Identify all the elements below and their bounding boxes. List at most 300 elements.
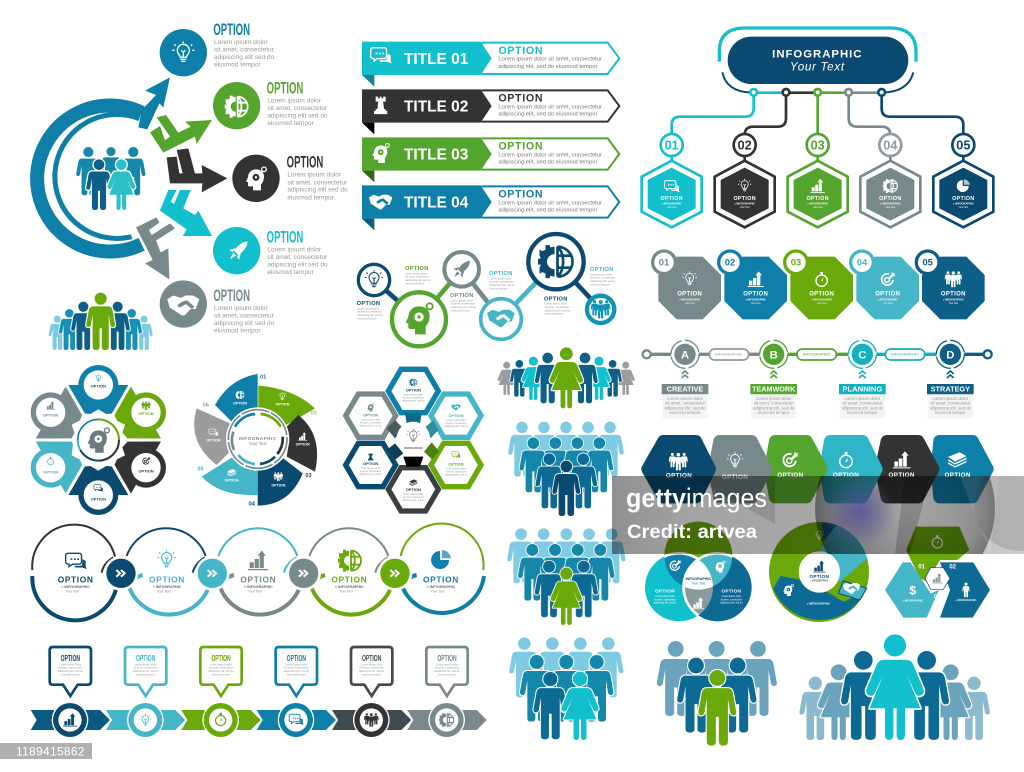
hexagon cycle labels: sit amet, consectetur	[403, 397, 424, 400]
option 3: head: Lorem ipsum dolor	[287, 172, 342, 179]
callout 3: adipiscing elit, sed do	[208, 669, 234, 673]
node B: teamwork: B	[770, 349, 778, 361]
rounded hexagon row	[647, 441, 988, 497]
callout 3	[200, 647, 242, 696]
circular pie diagram	[769, 522, 869, 622]
callout 1	[50, 647, 91, 696]
circle 4: Your Text	[339, 590, 353, 594]
option 5: handshake	[160, 280, 275, 335]
hexagon cycle labels: OPTION	[448, 462, 464, 467]
node A: creative: sit amet, consectetur	[665, 401, 706, 406]
hexagon cycle connectors: INFOGRAPHIC	[404, 446, 423, 450]
circle 1: OPTION	[58, 574, 94, 584]
option 5: handshake: eiusmod tempor	[214, 328, 261, 335]
option 5: handshake: sit amet, consectetur	[214, 313, 275, 320]
hexagon 05: » INFOGRAPHIC	[953, 202, 974, 206]
hexagon 03: » INFOGRAPHIC	[807, 202, 828, 206]
chevron button 1	[104, 556, 138, 591]
octagon 05: OPTION	[941, 291, 966, 297]
circular pie diagram: OPTION	[809, 574, 830, 579]
spiral pie: labels: OPTION	[296, 443, 310, 447]
hexagon 02: Your Text	[740, 206, 750, 209]
option 3: head	[232, 153, 348, 202]
network of connected circles: sit amet, consectetur	[357, 310, 382, 314]
pill: infographic 1	[709, 349, 749, 360]
panel: radial arrows with options	[37, 20, 348, 350]
option 4: rocket: Lorem ipsum dolor	[267, 246, 322, 253]
octagon 05	[916, 251, 985, 319]
hexagon 05	[933, 134, 993, 227]
callout 5: Lorem ipsum dolor	[361, 662, 383, 666]
octagon 05: 05	[922, 258, 933, 268]
hexagon trio	[885, 527, 990, 618]
circle 2: Your Text	[157, 590, 171, 594]
hexagon cycle labels	[360, 379, 468, 502]
option 4: rocket: sit amet, consectetur	[267, 254, 328, 261]
circle 5: OPTION	[423, 574, 459, 584]
hexagon trio: » INFOGRAPHIC	[902, 599, 923, 603]
option 5: handshake: Lorem ipsum dolor	[214, 305, 269, 312]
people in ring	[76, 147, 145, 210]
banner 04: adipiscing elit, sed do eiusmod tempor	[498, 208, 598, 214]
outer ring arc	[37, 105, 142, 251]
hexagon 02: » INFOGRAPHIC	[734, 202, 755, 206]
banner 01: Lorem ipsum dolor sit amet, consectetur	[498, 57, 602, 63]
hexagon 05: 05	[956, 139, 970, 153]
watermark band: Credit: artvea	[627, 522, 757, 543]
hexagon 01: 01	[665, 139, 679, 153]
six-segment wheel: OPTION	[138, 411, 154, 416]
option 2: globe	[213, 78, 328, 129]
hexagon trio: 03	[934, 594, 941, 600]
spiral pie: center: INFOGRAPHIC	[239, 436, 277, 441]
node A: creative	[662, 340, 708, 418]
option 4: rocket	[213, 227, 328, 276]
node B: teamwork: sit amet, consectetur	[754, 401, 794, 406]
pill: infographic 3	[885, 349, 925, 360]
hexagon cycle labels: sit amet, consectetur	[445, 422, 467, 425]
hexagon cycle labels: OPTION	[448, 413, 464, 418]
node C: planning	[839, 340, 886, 418]
octagon 02: Your Text	[751, 302, 761, 305]
network of connected circles: adipiscing elit, sed do	[590, 279, 616, 283]
hexagon row contents: OPTION	[945, 472, 971, 479]
option 1: bulb: OPTION	[213, 20, 250, 39]
spiral pie: labels: 06	[203, 403, 209, 409]
network of connected circles: Lorem ipsum dolor	[451, 298, 473, 302]
hexagon trio: 01	[918, 564, 926, 570]
callout 4: OPTION	[287, 654, 306, 663]
spiral pie: labels: 01	[260, 374, 266, 380]
node D: strategy: eiusmod tempor	[935, 410, 966, 415]
hexagon 04: » INFOGRAPHIC	[880, 202, 901, 206]
network of connected circles: OPTION	[590, 267, 614, 273]
callout 2: adipiscing elit, sed do	[133, 669, 159, 673]
venn diagram: sit amet, consectetur	[721, 598, 742, 601]
hexagon cycle labels: Lorem ipsum dolor	[404, 394, 423, 397]
circle 1	[32, 525, 117, 620]
hexagon cycle	[346, 369, 481, 511]
venn diagram: Lorem ipsum dolor	[722, 595, 741, 598]
callout 5	[351, 647, 392, 696]
hexagon 04: OPTION	[879, 196, 902, 202]
option 3: head: sit amet, consectetur	[287, 179, 348, 186]
hexagon cycle labels: Lorem ipsum dolor	[361, 419, 381, 422]
six-segment wheel: OPTION	[91, 384, 106, 389]
network of connected circles: Lorem ipsum dolor	[590, 272, 612, 276]
network of connected circles: OPTION	[544, 296, 568, 302]
octagon 04: 04	[857, 258, 868, 268]
banner 01	[362, 42, 619, 87]
hexagon cycle labels: adipiscing elit, sed do	[445, 425, 468, 428]
network of connected circles: OPTION	[405, 266, 429, 272]
network of connected circles: adipiscing elit, sed do	[405, 278, 431, 282]
callout 2: Lorem ipsum dolor	[135, 662, 157, 666]
callout 4: Lorem ipsum dolor	[285, 662, 307, 666]
arrow: blue	[138, 77, 170, 129]
hexagon cycle labels: adipiscing elit, sed do	[402, 400, 425, 403]
hexagon cycle labels: Lorem ipsum dolor	[446, 468, 466, 471]
hexagon cycle labels: sit amet, consectetur	[445, 471, 467, 474]
hexagon cycle labels: OPTION	[406, 487, 421, 492]
hexagon 01: » INFOGRAPHIC	[661, 202, 682, 206]
banner 02: adipiscing elit, sed do eiusmod tempor	[498, 112, 598, 118]
people row 4: pair in front	[509, 637, 623, 740]
hexagon 03: OPTION	[806, 196, 829, 202]
banner 03: adipiscing elit, sed do eiusmod tempor	[498, 160, 598, 166]
hexagon 03: 03	[811, 139, 825, 153]
banner 01: adipiscing elit, sed do eiusmod tempor	[498, 64, 598, 70]
hexagon cycle labels: adipiscing elit, sed do	[360, 425, 382, 428]
watermark band	[612, 476, 1024, 554]
node D: strategy: D	[946, 349, 954, 361]
hexagon row contents: OPTION	[666, 473, 692, 480]
node B: teamwork	[750, 340, 797, 418]
venn diagram: adipiscing elit, sed do	[720, 602, 743, 605]
callout 1: sit amet, consectetur	[58, 666, 83, 670]
circle 5	[401, 524, 484, 613]
chevron button 2	[195, 556, 230, 591]
circle 1: Your Text	[65, 590, 79, 594]
option 4: rocket: eiusmod tempor	[267, 269, 315, 276]
callout 1: adipiscing elit, sed do	[58, 669, 84, 673]
pill: infographic 1: INFOGRAPHIC	[715, 352, 743, 357]
connectors	[672, 89, 963, 135]
timeline line	[643, 350, 992, 358]
network of connected circles: Lorem ipsum dolor	[357, 306, 379, 310]
banner 02: TITLE 02	[404, 99, 468, 116]
option 4: rocket: adipiscing elit sed do	[267, 261, 328, 268]
network of connected circles	[357, 234, 616, 346]
image id tag: 1189415862	[16, 744, 85, 758]
circle 4: » INFOGRAPHIC	[335, 585, 364, 589]
panel: wheel, pie and hexagon cycle	[31, 365, 481, 515]
octagon 05: Your Text	[949, 302, 958, 305]
venn diagram	[645, 522, 752, 622]
hexagon 01	[642, 134, 702, 227]
network of connected circles: OPTION	[357, 301, 380, 307]
octagon 04: OPTION	[875, 291, 900, 297]
hexagon cycle labels: OPTION	[363, 413, 378, 418]
hexagon 01: OPTION	[660, 196, 683, 202]
banner 02: Lorem ipsum dolor sit amet, consectetur	[498, 104, 602, 110]
callout 2: OPTION	[136, 654, 155, 663]
circular pie diagram: » INFOGRAPHIC	[807, 601, 831, 605]
option 1: bulb: adipiscing elit sed do	[214, 54, 275, 61]
octagon 01: Your Text	[685, 302, 695, 305]
banner 03	[362, 137, 619, 182]
option 1: bulb: eiusmod tempor	[214, 62, 261, 69]
octagon 03: » INFOGRAPHIC	[811, 298, 832, 302]
callout 2: sit amet, consectetur	[133, 666, 158, 670]
banner 02	[362, 89, 619, 134]
hexagon 03: Your Text	[813, 206, 823, 209]
hexagon trio: 02	[949, 564, 957, 570]
network of connected circles: eiusmod tempor	[590, 282, 609, 286]
node A: creative: A	[681, 349, 689, 361]
watermark text: gettyimages	[626, 483, 767, 513]
octagon 05: » INFOGRAPHIC	[943, 298, 964, 302]
hexagon cycle labels: adipiscing elit, sed do	[360, 473, 382, 476]
people row 3: pyramid with green woman	[507, 528, 625, 625]
callout 6: adipiscing elit, sed do	[434, 669, 460, 673]
circle 4	[309, 528, 391, 615]
hexagon cycle labels: adipiscing elit, sed do	[402, 499, 425, 502]
option 3: head: adipiscing elit sed do	[287, 187, 348, 194]
node C: planning: eiusmod tempor	[847, 410, 878, 415]
node D: strategy	[927, 340, 974, 418]
node D: strategy: sit amet, consectetur	[930, 401, 971, 406]
people row 1: woman leader	[498, 347, 635, 408]
venn diagram: INFOGRAPHIC	[686, 577, 711, 581]
chevron button 3	[286, 556, 321, 591]
people group: green man front	[657, 641, 777, 746]
network of connected circles: adipiscing elit, sed do	[451, 305, 477, 309]
node D: strategy: adipiscing elit, sed do	[930, 405, 972, 410]
spiral pie: labels: OPTION	[275, 403, 290, 407]
octagon 04: Your Text	[883, 302, 893, 305]
arrow step 5	[332, 702, 411, 738]
circle 4: OPTION	[331, 574, 367, 584]
network of connected circles: sit amet, consectetur	[590, 276, 615, 280]
people group with green leader	[49, 293, 153, 350]
panel: hexagon row and venn diagrams	[645, 441, 990, 622]
six-segment wheel	[31, 365, 166, 515]
hexagon 02	[715, 134, 775, 227]
callout 2	[125, 647, 166, 696]
banner 01: OPTION	[498, 45, 543, 57]
spiral pie: segments	[194, 374, 317, 506]
network of connected circles: OPTION	[489, 271, 513, 277]
hexagon row contents: OPTION	[889, 472, 915, 479]
circle 3: » INFOGRAPHIC	[244, 585, 273, 589]
octagon 03: OPTION	[809, 291, 834, 297]
spiral pie: labels: 02	[311, 410, 317, 416]
network of connected circles: sit amet, consectetur	[405, 275, 430, 279]
circle 3: Your Text	[248, 590, 262, 594]
node A: creative: CREATIVE	[667, 385, 703, 394]
arrow: green	[150, 115, 212, 153]
hexagon cycle labels: sit amet, consectetur	[360, 422, 382, 425]
node D: strategy: STRATEGY	[931, 385, 970, 394]
hexagon cycle labels: Lorem ipsum dolor	[446, 419, 466, 422]
network of connected circles: sit amet, consectetur	[489, 280, 514, 284]
hexagon 04: 04	[883, 139, 897, 153]
callout 3: OPTION	[211, 654, 231, 663]
callout 6	[426, 647, 468, 696]
network of connected circles: sit amet, consectetur	[545, 305, 569, 309]
banner 03: OPTION	[498, 141, 543, 153]
network of connected circles: Lorem ipsum dolor	[545, 302, 567, 306]
six-segment wheel: OPTION	[43, 469, 58, 474]
spiral pie: labels	[197, 374, 317, 508]
hexagon cycle labels: Lorem ipsum dolor	[404, 493, 423, 496]
circle 2	[127, 528, 208, 615]
node C: planning: sit amet, consectetur	[842, 401, 883, 406]
hexagon row contents: OPTION	[777, 472, 804, 479]
option 4: rocket: OPTION	[267, 227, 303, 246]
network of connected circles: OPTION	[450, 293, 474, 299]
banner 04: OPTION	[498, 189, 543, 201]
hexagon row contents: OPTION	[833, 472, 859, 479]
venn diagram: Lorem ipsum dolor	[655, 595, 675, 598]
callout 4: sit amet, consectetur	[284, 666, 309, 670]
callout 4	[276, 647, 317, 696]
option 2: globe: sit amet, consectetur	[267, 105, 328, 112]
callout 5: sit amet, consectetur	[359, 666, 384, 670]
pill: infographic 3: INFOGRAPHIC	[891, 352, 919, 357]
arrow: gray	[136, 217, 175, 279]
option 1: bulb	[160, 20, 275, 76]
callout 2: eiusmod tempor	[136, 672, 155, 676]
network of connected circles: sit amet, consectetur	[451, 302, 475, 306]
arrow step 2	[106, 702, 185, 738]
option 2: globe: OPTION	[267, 78, 303, 97]
hexagon row contents	[666, 451, 971, 481]
hexagon 04: Your Text	[886, 206, 895, 209]
network of connected circles: adipiscing elit, sed do	[357, 313, 383, 317]
spiral pie: labels: 03	[305, 473, 312, 479]
option 3: head: OPTION	[287, 153, 323, 172]
six-segment wheel: OPTION	[91, 497, 106, 502]
callout 6: sit amet, consectetur	[435, 666, 459, 670]
spiral pie: labels: OPTION	[206, 439, 221, 443]
panel: five linked circles and callout arrows	[31, 524, 487, 738]
banner 02: OPTION	[498, 93, 543, 105]
hexagon cycle labels: sit amet, consectetur	[403, 496, 424, 499]
network of connected circles: eiusmod tempor	[489, 286, 508, 290]
node A: creative: eiusmod tempor	[669, 410, 701, 415]
image id tag	[0, 743, 92, 759]
venn diagram: adipiscing elit, sed do	[654, 602, 677, 605]
node C: planning: C	[858, 349, 866, 361]
inner ring arc	[55, 114, 139, 238]
option 3: head: eiusmod tempor	[287, 194, 335, 201]
spiral pie: center: Your Text	[249, 441, 267, 446]
banner 04: TITLE 04	[404, 195, 468, 212]
node A: creative: Lorem ipsum dolor	[667, 396, 703, 401]
hexagon 01: Your Text	[667, 206, 677, 209]
pill: infographic 2	[797, 349, 836, 360]
node D: strategy: Lorem ipsum dolor	[932, 396, 969, 401]
banner 04: Lorem ipsum dolor sit amet, consectetur	[498, 200, 602, 206]
six-segment wheel: OPTION	[138, 469, 154, 474]
callout 6: OPTION	[437, 654, 457, 663]
network of connected circles: eiusmod tempor	[357, 316, 376, 320]
hexagon 05: OPTION	[952, 196, 975, 202]
callout 1: OPTION	[61, 654, 80, 663]
octagon 02: OPTION	[743, 291, 768, 297]
octagon 02	[719, 251, 787, 319]
option 1: bulb: sit amet, consectetur	[214, 47, 275, 54]
callout 3: Lorem ipsum dolor	[210, 662, 232, 666]
node B: teamwork: adipiscing elit, sed do	[753, 405, 795, 410]
circle 2: OPTION	[149, 574, 185, 584]
hexagon row contents: OPTION	[722, 474, 748, 481]
circular pie diagram: » INFOGRAPHIC	[810, 580, 829, 583]
node B: teamwork: eiusmod tempor	[758, 410, 790, 415]
callout 4: adipiscing elit, sed do	[284, 669, 310, 673]
network of connected circles: adipiscing elit, sed do	[545, 308, 571, 312]
callout 1: eiusmod tempor	[61, 672, 80, 676]
header pill: Your Text	[790, 61, 845, 74]
banner 03: TITLE 03	[404, 147, 468, 164]
network of connected circles: Lorem ipsum dolor	[489, 276, 511, 280]
octagon 01: 01	[659, 258, 669, 268]
callout 1: Lorem ipsum dolor	[59, 662, 81, 666]
panel: people groups column	[498, 347, 635, 740]
hexagon cycle labels: Lorem ipsum dolor	[361, 467, 381, 470]
node B: teamwork: Lorem ipsum dolor	[756, 396, 792, 401]
venn diagram: OPTION	[721, 588, 742, 593]
callout 6: eiusmod tempor	[437, 672, 457, 676]
hexagon cycle connectors	[387, 413, 439, 467]
option 1: bulb: Lorem ipsum dolor	[214, 39, 269, 46]
circle 3	[218, 528, 299, 615]
network of connected circles: Lorem ipsum dolor	[405, 271, 427, 275]
callout 3: eiusmod tempor	[211, 672, 231, 676]
hexagon cycle labels: OPTION	[406, 388, 421, 393]
spiral pie: labels: OPTION	[233, 401, 247, 405]
panel: bottom right people	[657, 634, 990, 746]
spiral pie: center	[226, 407, 289, 471]
network of connected circles: eiusmod tempor	[451, 308, 470, 312]
node C: planning: PLANNING	[842, 385, 883, 394]
pill: infographic 2: INFOGRAPHIC	[803, 352, 831, 357]
panel: org chart, octagons, timeline	[642, 28, 993, 418]
octagon 04	[851, 251, 919, 319]
hexagon 02: 02	[738, 139, 752, 153]
hexagon cycle labels: sit amet, consectetur	[360, 470, 382, 473]
people group: cyan woman front	[799, 634, 990, 740]
arrow step 4	[257, 702, 336, 738]
circle 5: » INFOGRAPHIC	[427, 585, 456, 589]
node A: creative: adipiscing elit, sed do	[664, 405, 706, 410]
hexagon 02: OPTION	[733, 196, 756, 202]
banner 03: Lorem ipsum dolor sit amet, consectetur	[498, 152, 602, 158]
octagon 01: » INFOGRAPHIC	[679, 298, 700, 302]
six-segment wheel: OPTION	[43, 413, 58, 418]
octagon 01	[653, 251, 721, 319]
venn diagram: OPTION	[655, 588, 675, 593]
header pill	[719, 28, 916, 93]
octagon 03	[785, 251, 853, 319]
people row 2: pyramid with navy front	[508, 422, 624, 516]
hexagon trio: $	[909, 583, 916, 597]
arrow step 1	[31, 702, 110, 738]
octagon 04: » INFOGRAPHIC	[877, 298, 898, 302]
option 5: handshake: adipiscing elit sed do	[214, 320, 275, 327]
